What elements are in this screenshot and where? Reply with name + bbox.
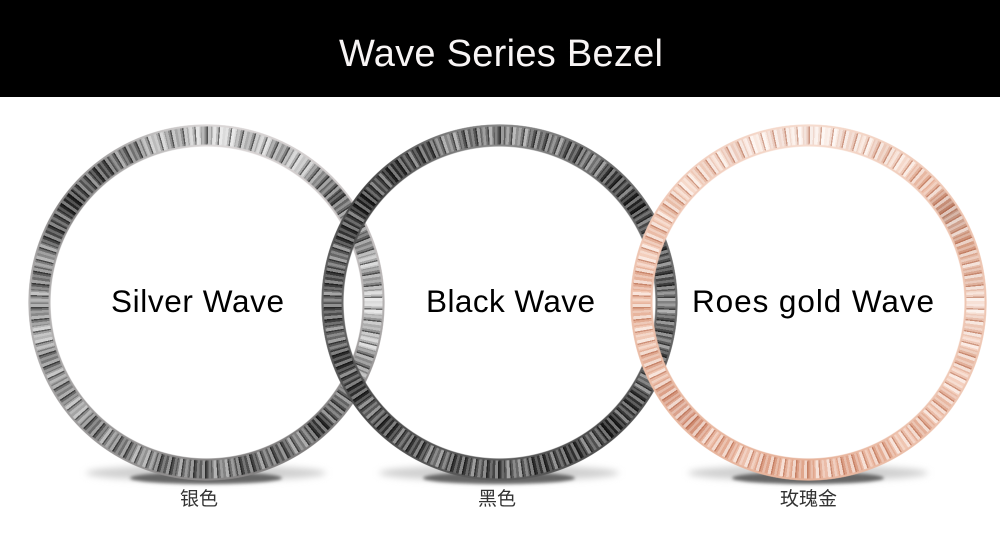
label: Roes gold Wave: Roes gold Wave <box>692 283 934 319</box>
label: Silver Wave: Silver Wave <box>111 283 284 319</box>
caption: rose gold: 玫瑰金 <box>780 488 837 510</box>
shadow: rose gold <box>688 465 928 484</box>
caption: black: 黑色 <box>478 488 516 510</box>
bezel ring: silver <box>28 124 385 481</box>
shadow: silver <box>86 465 326 484</box>
caption: silver: 银色 <box>180 488 218 510</box>
shadow: black <box>379 465 619 484</box>
bezel ring: rose gold <box>630 124 987 481</box>
label: Black Wave: Black Wave <box>426 283 595 319</box>
header bar <box>0 0 1000 97</box>
title: Wave Series Bezel <box>339 33 663 75</box>
bezel ring: black <box>321 124 678 480</box>
